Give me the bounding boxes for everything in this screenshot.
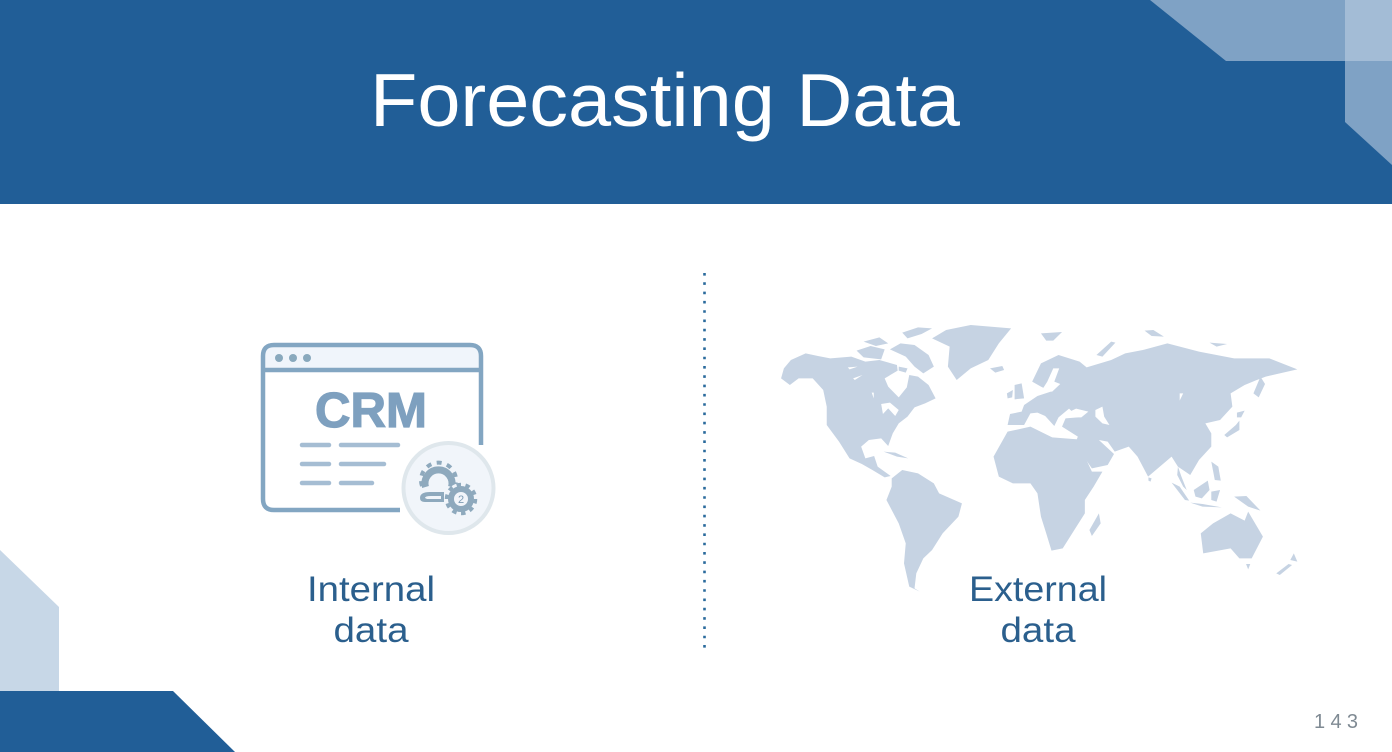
- label: external data: External: [969, 570, 1107, 609]
- New Guinea: [1234, 496, 1260, 511]
- label: internal data: [307, 570, 435, 650]
- Greenland: [932, 325, 1011, 380]
- Sumatra: [1172, 483, 1189, 501]
- icon: CRM window: [263, 345, 494, 533]
- British Isles: [1015, 383, 1024, 399]
- Sulawesi and Philippines: [1211, 490, 1220, 502]
- settings badge: 2: [458, 494, 464, 506]
- Arctic islands: [902, 327, 932, 338]
- Iceland: [990, 366, 1004, 373]
- window frame: [263, 345, 481, 510]
- Kamchatka: [1253, 377, 1265, 397]
- Great Lakes: [848, 367, 899, 416]
- Eurasia: [1008, 343, 1297, 477]
- label: external data: data: [1000, 611, 1076, 650]
- Borneo: [1194, 481, 1210, 498]
- Africa: [994, 427, 1102, 551]
- window title bar: [263, 345, 481, 371]
- settings badge: [404, 443, 494, 533]
- CRM label: CRM: [315, 384, 427, 438]
- Madagascar: [1089, 513, 1101, 536]
- page number: 143: [1314, 711, 1358, 733]
- text lines: [302, 445, 398, 483]
- Malay peninsula: [1177, 467, 1187, 490]
- Svalbard and northern islands: [1041, 332, 1062, 341]
- label: internal data: Internal: [307, 570, 435, 609]
- Java: [1190, 503, 1222, 507]
- center dotted divider: [703, 273, 706, 650]
- Tasmania: [1246, 564, 1250, 569]
- Sri Lanka: [1148, 477, 1152, 482]
- North America: [781, 353, 936, 477]
- window dots: [275, 354, 311, 362]
- Australia: [1201, 512, 1263, 558]
- label: external data: [969, 570, 1107, 650]
- corner decoration: bottom left: [0, 550, 235, 752]
- South America: [886, 470, 962, 592]
- Japan: [1224, 421, 1239, 437]
- Caribbean: [884, 452, 908, 458]
- Black Sea and Caspian: [1041, 368, 1183, 425]
- world map: [781, 325, 1297, 592]
- New Zealand: [1276, 564, 1292, 575]
- label: internal data: data: [334, 611, 409, 650]
- title: Forecasting Data: [370, 58, 960, 142]
- header banner: [0, 0, 1392, 204]
